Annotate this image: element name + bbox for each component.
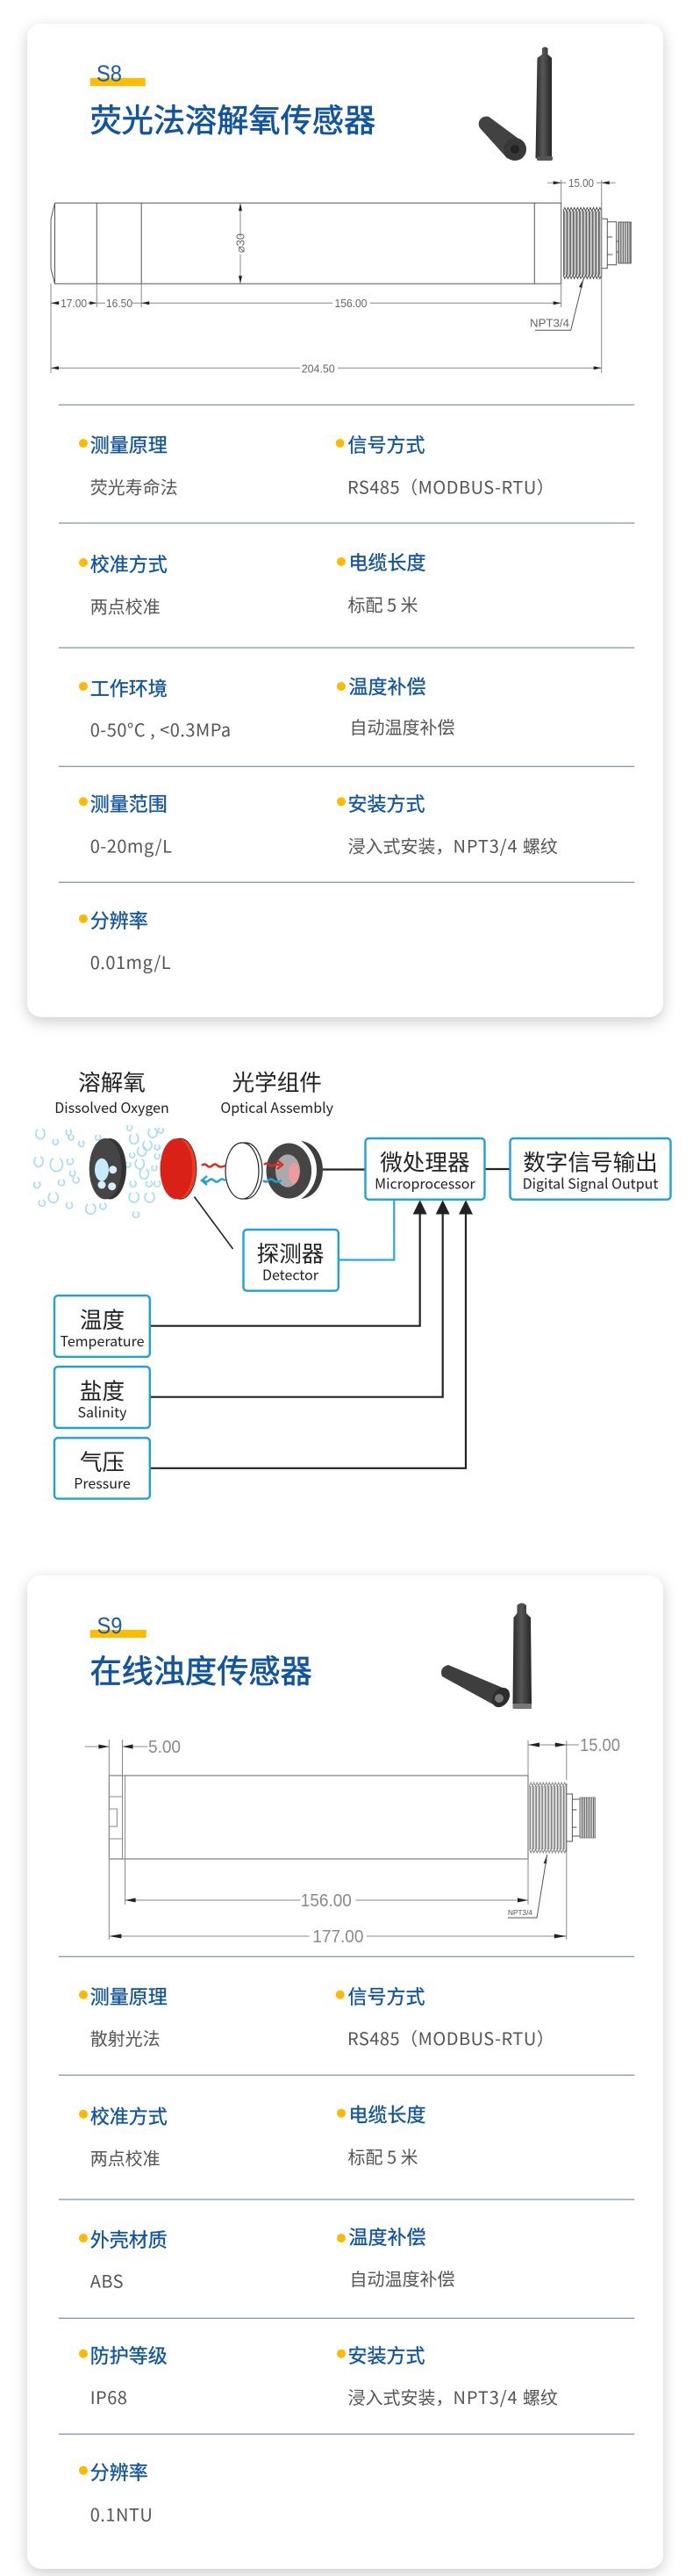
spec: installation method [337, 789, 558, 858]
box: detector: 探测器 [257, 1237, 324, 1269]
box: temperature: 温度 [80, 1302, 125, 1335]
product photo: two black probes [479, 47, 553, 161]
box: detector [244, 1230, 339, 1291]
spec: cable length [337, 548, 426, 616]
spec: measuring principle: 测量原理 [90, 1982, 168, 2010]
connector: optical assembly to microprocessor [323, 1168, 365, 1171]
spec: housing material: 外壳材质 [90, 2225, 168, 2253]
spec: cable length [337, 2099, 426, 2169]
spec: temperature compensation [337, 672, 454, 739]
icon: black sensor disc [89, 1138, 126, 1199]
technical drawing: S8 dimensions: 204.50 [302, 362, 335, 376]
arrow: temperature input [150, 1200, 427, 1326]
connector: detector to microprocessor [339, 1200, 394, 1260]
divider lines [59, 1956, 634, 2434]
box: digital signal output: 数字信号输出 [523, 1145, 658, 1178]
spec: resolution: 分辨率 [90, 906, 148, 934]
heading: optical assembly: 光学组件 [232, 1066, 322, 1097]
connector: red disc to detector [195, 1197, 233, 1249]
heading: optical assembly [220, 1066, 334, 1117]
spec: working environment [79, 674, 232, 742]
technical drawing: S9 dimensions: 15.00 [580, 1736, 620, 1755]
spec: temperature compensation [337, 2222, 454, 2291]
divider lines [59, 405, 634, 882]
spec: measuring principle: 荧光寿命法 [90, 473, 178, 499]
spec: cable length: 标配 5 米 [347, 592, 418, 616]
spec: calibration method: 校准方式 [90, 549, 168, 578]
icon: optical assembly ring [267, 1141, 323, 1199]
spec: calibration method: 两点校准 [90, 2144, 161, 2170]
product photo: two turbidity probes [441, 1603, 532, 1711]
spec: working environment: 0-50°C , <0.3MPa [90, 716, 232, 742]
box: temperature [54, 1295, 150, 1357]
spec: temperature compensation: 自动温度补偿 [349, 714, 454, 739]
box: microprocessor: 微处理器 [380, 1145, 470, 1178]
spec: calibration method [79, 2101, 168, 2170]
technical drawing: S9 dimensions [85, 1736, 620, 1947]
spec: signal mode [336, 430, 554, 499]
S9 model tag: S9 [96, 1612, 123, 1639]
technical drawing: S8 dimensions: NPT3/4 [530, 316, 569, 330]
spec: temperature compensation: 温度补偿 [349, 672, 426, 700]
box: pressure [54, 1438, 150, 1499]
spec: housing material [79, 2225, 168, 2293]
spec: temperature compensation: 自动温度补偿 [349, 2265, 454, 2291]
box: pressure: 气压 [80, 1445, 125, 1477]
arrow: fluorescence light blue [202, 1176, 282, 1185]
technical drawing: S8 dimensions: 156.00 [335, 297, 367, 310]
spec: protection rating [79, 2341, 168, 2409]
spec: measuring principle [79, 1982, 168, 2050]
spec: protection rating: IP68 [90, 2384, 127, 2409]
spec: resolution: 0.1NTU [90, 2501, 153, 2526]
box: digital signal output [511, 1138, 670, 1200]
spec: measuring principle [79, 430, 178, 499]
heading: dissolved oxygen: Dissolved Oxygen [54, 1096, 169, 1117]
box: microprocessor: Microprocessor [375, 1173, 475, 1194]
spec: calibration method: 校准方式 [90, 2101, 168, 2129]
spec: resolution: 0.01mg/L [90, 949, 171, 974]
S9 model tag [90, 1612, 146, 1639]
box: detector: Detector [262, 1264, 319, 1285]
panel: S8 fluorescence dissolved oxygen sensor [27, 24, 663, 1017]
spec: installation method: 安装方式 [347, 2341, 425, 2369]
arrow: pressure input [150, 1200, 473, 1468]
spec: resolution: 分辨率 [90, 2458, 148, 2486]
heading: optical assembly: Optical Assembly [220, 1096, 334, 1117]
spec: resolution [79, 906, 171, 974]
spec: installation method: 安装方式 [347, 789, 425, 817]
box: salinity: Salinity [77, 1401, 127, 1422]
box: salinity [54, 1367, 150, 1428]
spec: temperature compensation: 温度补偿 [349, 2222, 426, 2250]
connector: microprocessor to output [484, 1168, 511, 1170]
icon: white optical disc [225, 1143, 262, 1199]
panel: S9 online turbidity sensor [27, 1575, 663, 2569]
S8 model tag: S8 [96, 61, 122, 87]
spec: working environment: 工作环境 [90, 674, 168, 702]
spec: signal mode: 信号方式 [347, 1982, 425, 2010]
spec: measuring principle: 测量原理 [90, 430, 168, 458]
title: 在线浊度传感器 [89, 1647, 312, 1692]
spec: housing material: ABS [90, 2268, 124, 2293]
arrow: salinity input [150, 1200, 450, 1397]
technical drawing: S8 dimensions: 15.00 [568, 176, 594, 190]
box: temperature: Temperature [60, 1330, 145, 1351]
technical drawing: S8 dimensions: 16.50 [106, 297, 132, 310]
spec: calibration method [79, 549, 168, 618]
technical drawing: S8 dimensions [51, 176, 631, 376]
spec: measuring range: 测量范围 [90, 789, 168, 817]
panel: working principle diagram [34, 1066, 671, 1499]
spec: cable length: 电缆长度 [349, 2099, 426, 2128]
spec: signal mode: RS485（MODBUS-RTU） [347, 473, 554, 499]
spec: calibration method: 两点校准 [90, 592, 161, 618]
spec: measuring range: 0-20mg/L [90, 833, 173, 858]
icon: oxygen bubbles [34, 1125, 163, 1217]
spec: cable length: 标配 5 米 [347, 2143, 418, 2169]
technical drawing: S8 dimensions: ⌀30 [233, 233, 247, 253]
technical drawing: S9 dimensions: 177.00 [312, 1927, 363, 1947]
S8 model tag [90, 61, 146, 87]
box: digital signal output: Digital Signal Output [523, 1173, 658, 1194]
technical drawing: S9 dimensions: 5.00 [148, 1738, 181, 1757]
heading: dissolved oxygen: 溶解氧 [78, 1066, 146, 1097]
spec: signal mode: RS485（MODBUS-RTU） [347, 2025, 554, 2050]
spec: installation method: 浸入式安装，NPT3/4 螺纹 [347, 833, 558, 858]
technical drawing: S8 dimensions: 17.00 [61, 297, 87, 310]
spec: resolution [79, 2458, 153, 2526]
technical drawing: S9 dimensions: 156.00 [301, 1891, 352, 1911]
arrow: excitation light red [202, 1160, 282, 1169]
icon: red fluorescent disc [160, 1138, 196, 1199]
box: salinity: 盐度 [80, 1374, 125, 1406]
spec: installation method [337, 2341, 558, 2409]
spec: measuring principle: 散射光法 [90, 2025, 161, 2050]
heading: dissolved oxygen [54, 1066, 169, 1117]
technical drawing: S9 dimensions: NPT3/4 [508, 1909, 533, 1917]
spec: signal mode [336, 1982, 554, 2050]
spec: protection rating: 防护等级 [90, 2341, 168, 2369]
spec: measuring range [79, 789, 173, 858]
spec: cable length: 电缆长度 [349, 548, 426, 576]
spec: installation method: 浸入式安装，NPT3/4 螺纹 [347, 2384, 558, 2409]
box: microprocessor [365, 1138, 484, 1200]
title: 荧光法溶解氧传感器 [89, 96, 375, 141]
spec: signal mode: 信号方式 [347, 430, 425, 458]
box: pressure: Pressure [74, 1472, 131, 1493]
